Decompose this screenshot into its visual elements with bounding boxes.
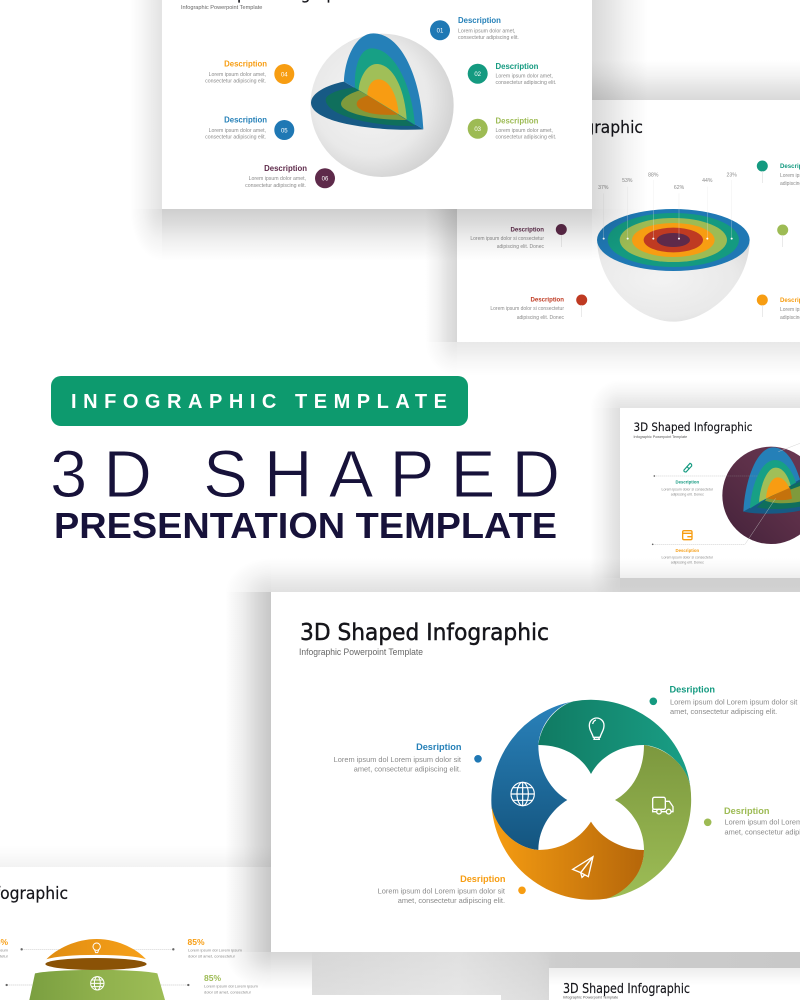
title: presentation template: PRESENTATION TEMPLATE xyxy=(54,505,557,546)
icon: globe xyxy=(511,782,534,806)
callout: teal description: adipiscing elit. Donec xyxy=(671,492,704,496)
callout: red description xyxy=(490,294,587,321)
callout 05: Description xyxy=(224,116,267,124)
subheading: bottom right slide: Infographic Powerpoint Template xyxy=(563,996,618,1000)
callout 01: 01 xyxy=(437,28,444,34)
callout 02: 02 xyxy=(474,72,482,78)
icon: pencil xyxy=(684,463,692,472)
callout: teal desription: amet, consectetur adipiscing elit. xyxy=(670,707,777,716)
chart: stacked domes xyxy=(5,939,189,1000)
segment: blue xyxy=(491,701,573,850)
callout 03: Lorem ipsum dolor amet, xyxy=(496,128,553,134)
stat: green right xyxy=(204,973,258,994)
callout: blue desription xyxy=(334,742,482,774)
callout 06: Lorem ipsum dolor amet, xyxy=(249,176,306,182)
chart: hemisphere with rings: 62% xyxy=(674,185,685,191)
subheading: sphere slide: Infographic Powerpoint Template xyxy=(181,5,262,11)
callout: blue desription: amet, consectetur adipiscing elit. xyxy=(354,764,461,774)
stat: green right: dolor sit amet, consectetur xyxy=(204,990,252,994)
stat: orange right: 85% xyxy=(188,937,205,947)
stat: orange right xyxy=(188,937,242,958)
callout: plum description: Description xyxy=(510,226,544,234)
callout 05: consectetur adipiscing elit. xyxy=(205,134,266,140)
callout: teal description: Lorem ipsum dolor si consectetur xyxy=(662,488,714,492)
icon: wallet xyxy=(683,531,692,540)
title: 3D shaped: 3D SHAPED xyxy=(50,437,560,512)
chart: hemisphere with rings: 88% xyxy=(648,172,659,178)
callout: blue desription: Desription xyxy=(416,742,462,752)
heading: main slide title: 3D Shaped Infographic xyxy=(300,618,549,646)
callout: teal description xyxy=(757,160,800,187)
callout: orange desription xyxy=(378,874,526,905)
stat: orange left xyxy=(0,937,9,958)
segment: orange xyxy=(492,807,644,900)
callout: orange desription: Lorem ipsum dol Lorem ipsum dolor sit xyxy=(378,886,505,896)
subheading: main slide: Infographic Powerpoint Template xyxy=(299,647,423,657)
callout 04 xyxy=(205,60,294,84)
callout 06: Description xyxy=(264,164,307,173)
callout 03: consectetur adipiscing elit. xyxy=(496,134,556,140)
callout: orange description xyxy=(662,548,714,564)
callout 01 xyxy=(430,16,519,41)
callout: teal desription: Desription xyxy=(670,684,715,694)
icon: paper plane xyxy=(573,857,593,877)
icon: dome bulb xyxy=(93,943,100,953)
callout: orange desription: amet, consectetur adipiscing elit. xyxy=(398,896,505,905)
callout 04: Description xyxy=(224,60,267,68)
callout: green desription xyxy=(704,806,800,836)
callout 02: Description xyxy=(496,62,539,71)
chart: hemisphere with rings: 23% xyxy=(726,172,737,178)
icon: dome globe xyxy=(91,977,104,990)
chart: hemisphere with rings: 53% xyxy=(622,178,633,184)
callout: teal desription xyxy=(650,684,797,716)
callout 06 xyxy=(245,164,335,189)
callout: red description: Lorem ipsum dolor si consectetur xyxy=(490,306,564,312)
stat: green right: Lorem ipsum dol Lorem ipsum xyxy=(204,984,258,988)
callout: green desription: Desription xyxy=(724,806,770,816)
callout: orange description: adipiscing elit. Donec xyxy=(671,560,704,564)
callout: red description: Description xyxy=(530,296,564,304)
callout: plum description: adipiscing elit. Donec xyxy=(497,244,544,250)
panel: main petal circle slide xyxy=(271,592,800,952)
heading: plum sphere slide title: 3D Shaped Infographic xyxy=(634,420,752,434)
panel: stacked dome slide xyxy=(0,867,312,1000)
callout: orange description: Lorem ipsum dolor si consectetur xyxy=(662,556,714,560)
callout 02: consectetur adipiscing elit. xyxy=(496,80,556,86)
stat: green right: 85% xyxy=(204,973,221,983)
panel: bottom hidden slide xyxy=(312,995,501,1000)
callout 05: Lorem ipsum dolor amet, xyxy=(209,128,266,134)
callout 06: 06 xyxy=(322,177,329,183)
callout: orange description xyxy=(757,294,800,321)
panel: sphere cutaway slide xyxy=(162,0,592,209)
callout 04: consectetur adipiscing elit. xyxy=(205,78,266,84)
chart: plum sphere with wedge xyxy=(652,443,800,545)
callout 01: Lorem ipsum dolor amet, xyxy=(458,28,515,34)
callout 03: 03 xyxy=(474,127,482,133)
callout 04: Lorem ipsum dolor amet, xyxy=(209,72,266,78)
callout 05: 05 xyxy=(281,128,288,134)
chart: hemisphere with rings: 44% xyxy=(702,178,713,184)
callout: blue desription: Lorem ipsum dol Lorem ipsum dolor sit xyxy=(334,755,461,764)
panel: hemisphere slide xyxy=(457,100,800,342)
callout: teal description xyxy=(662,480,714,496)
callout: teal description: Description xyxy=(675,480,699,484)
stat: orange right: Lorem ipsum dol Lorem ipsum xyxy=(188,948,242,952)
chart: sphere with layered wedge xyxy=(310,33,454,177)
chart: hemisphere with rings: 37% xyxy=(598,185,609,191)
chart: four petal circle xyxy=(491,700,691,900)
callout 02: Lorem ipsum dolor amet, xyxy=(496,74,553,80)
callout: orange desription: Desription xyxy=(460,874,506,884)
icon: light bulb xyxy=(589,718,604,739)
callout 02 xyxy=(468,62,556,86)
callout 06: consectetur adipiscing elit. xyxy=(245,183,306,189)
callout: orange description: Description xyxy=(675,548,699,553)
icon: delivery truck xyxy=(653,797,673,814)
callout: green marker xyxy=(777,224,788,247)
heading: hemisphere slide title: 3D Shaped Infographic xyxy=(464,118,643,138)
badge: infographic template xyxy=(51,376,468,426)
callout 05 xyxy=(205,116,294,140)
callout 01: consectetur adipiscing elit. xyxy=(458,35,519,41)
heading: bottom right slide title: 3D Shaped Infographic xyxy=(563,982,690,997)
callout: teal desription: Lorem ipsum dol Lorem ipsum dolor sit xyxy=(670,698,797,706)
stat: orange right: dolor sit amet, consectetur xyxy=(188,954,236,958)
callout 03 xyxy=(468,116,556,140)
panel: plum sphere slide xyxy=(620,408,800,578)
callout: plum description: Lorem ipsum dolor si consectetur xyxy=(470,236,544,242)
segment: teal xyxy=(538,700,690,787)
chart: hemisphere with rings xyxy=(597,172,750,322)
badge: infographic template: INFOGRAPHIC TEMPLATE xyxy=(71,391,447,413)
callout 01: Description xyxy=(458,16,501,25)
callout: red description: adipiscing elit. Donec xyxy=(517,315,564,321)
subheading: plum sphere slide: Infographic Powerpoint Template xyxy=(634,435,687,439)
segment: green xyxy=(607,745,691,899)
callout: plum description xyxy=(470,224,567,250)
panel: bottom right slide xyxy=(549,968,800,1000)
callout 04: 04 xyxy=(281,72,288,78)
callout 03: Description xyxy=(496,116,539,126)
